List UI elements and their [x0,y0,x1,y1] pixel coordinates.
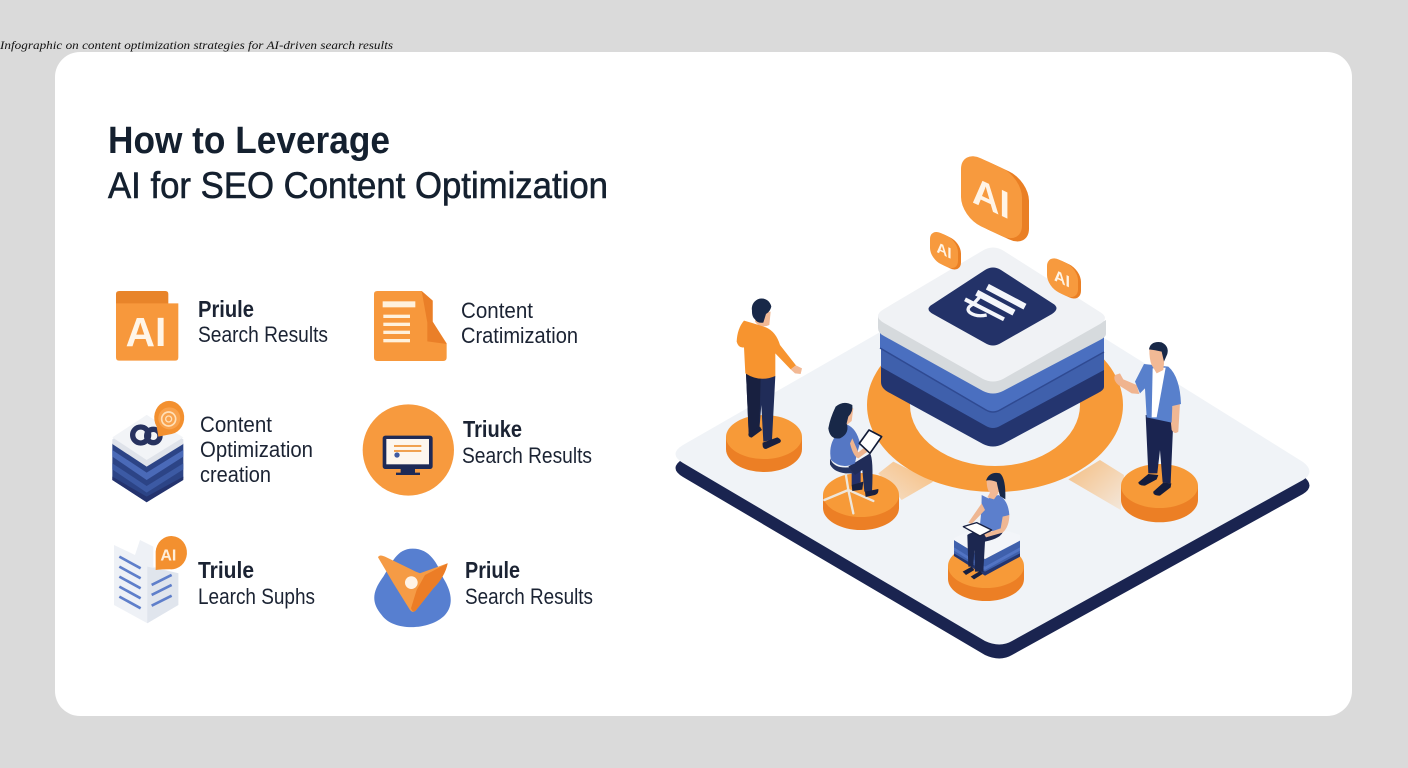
pedestal: left [726,415,802,472]
item: Content Optimization creation [112,401,313,502]
icon: open document with AI badge [114,536,187,623]
icon: blue blob with orange check [374,549,451,627]
person: standing blue jacket [1114,342,1181,496]
item: Content Optimization creation: Content [200,412,272,437]
item: AI folder, Priule Search Results [116,291,328,361]
pedestal: right [1121,464,1198,522]
icon: layered stack with badge [112,401,184,502]
title: How to Leverage [108,120,390,162]
person: standing orange sweater [737,298,802,449]
pedestal: middle left [823,473,899,530]
item: Triuke Search Results: Triuke [463,416,522,442]
icon: AI folder [116,291,178,361]
illustration: isometric AI platform [676,149,1310,658]
icon: small AI badge left [930,228,961,273]
pedestal: front [948,544,1024,601]
item: AI folder, Priule Search Results: Search Results [198,322,328,347]
person: seated on stack with tablet [954,473,1020,579]
icon: small AI badge right [1047,254,1081,303]
item: AI folder, Priule Search Results: Priule [198,296,254,322]
item: Priule Search Results (check): Search Results [465,584,593,609]
title [108,120,608,206]
item: Triule Learch Suphs: Learch Suphs [198,584,315,609]
central layered stack [878,248,1106,446]
connector strips [878,460,1124,510]
item: Triule Learch Suphs: Triule [198,557,254,583]
title: AI for SEO Content Optimization [108,165,608,206]
icon: small AI badge left: AI [937,240,951,263]
item: Priule Search Results (check): Priule [465,557,520,583]
icon: monitor in circle [363,404,454,496]
item: Content Cratimization: Content [461,298,533,323]
icon: large AI badge: AI [972,169,1010,228]
item: Priule Search Results (check) [374,549,593,627]
person: seated with tablet on chair [824,403,882,513]
item: Content Optimization creation: creation [200,462,271,487]
icon: central dark tile [928,268,1056,346]
caption: Infographic on content optimization strategies for AI-driven search results [0,38,393,52]
icon: small AI badge right: AI [1054,266,1070,292]
icon: orange document [374,291,447,361]
icon: large AI badge [961,149,1029,249]
item: Content Optimization creation: Optimization [200,437,313,462]
item: Triuke Search Results [363,404,592,496]
icon: open document with AI badge: AI [160,548,176,565]
platform base [676,268,1310,658]
icon: AI folder: AI [126,309,166,355]
item: Content Cratimization [374,291,578,361]
orange ring [867,318,1123,492]
item: Triuke Search Results: Search Results [462,443,592,468]
panel: main card [55,52,1352,716]
item: Triule Learch Suphs [114,536,315,623]
item: Content Cratimization: Cratimization [461,323,578,348]
